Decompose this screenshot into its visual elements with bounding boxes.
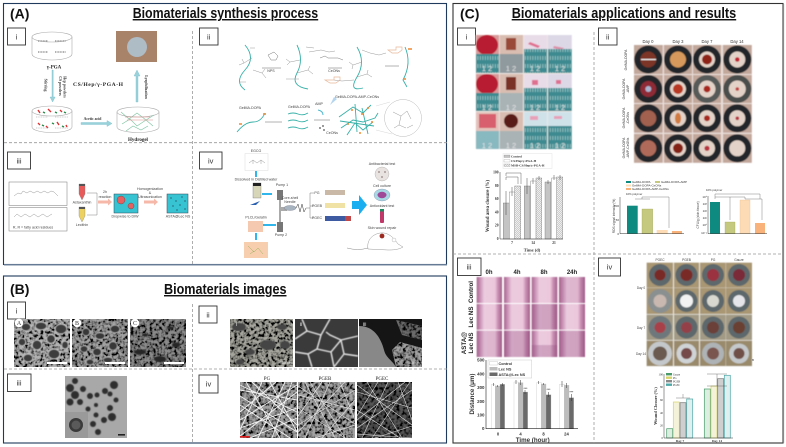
A-i hydrogel synthesis diagram: Hydrogel [128,138,149,143]
polymer strands [239,45,412,90]
C-iii distance bar chart: 8 [542,432,545,436]
A-ii GelMA-DOPA chemistry scheme: CeONs [328,69,340,73]
C-i wound closure photo grid: 1 2 [506,103,516,112]
petri dish [375,167,389,181]
A-iii astaxanthin nanosome preparation: Lecithin [76,223,88,227]
legend [488,360,532,378]
A-i hydrogel synthesis diagram: Hep powders [62,76,66,98]
legend: PG [673,377,677,380]
SEM image ii: dark cells with bright walls [295,319,358,367]
C-ii GelMA hydrogel wound photos: Day 0 [643,39,654,44]
magnified network circle [376,100,422,136]
C-iii distance bar chart: 500 [477,358,485,362]
C-i wound closure photo grid [476,35,572,150]
label B-ii [199,306,217,323]
label A-iv [200,152,222,169]
A-iii astaxanthin nanosome preparation [9,182,191,231]
A-ii GelMA-DOPA chemistry scheme: CeONs [326,131,338,135]
A-iv nanofiber fabrication and testing: PGEB [312,204,323,208]
label B-iii [8,374,31,392]
SEM image iii: surface and particles: 100 nm [408,361,420,365]
SEM image C: dense: C [133,321,137,327]
legend: ASTA@Lec NS [498,373,526,377]
C-i wound closure bar chart: 0 [497,237,499,241]
A-iv nanofiber fabrication and testing: PGEC [312,216,322,220]
A-iii astaxanthin nanosome preparation: Dropwise to DIW [112,214,139,218]
A-iv nanofiber fabrication and testing: Antioxidant test [370,204,394,208]
arrow: blue down fibers [255,233,257,240]
C-i wound closure photo grid: 1 2 [555,141,565,150]
C-iii distance bar chart [469,358,578,444]
C-i wound closure bar chart: 21 [552,241,556,245]
C-ii bar chart: ROS: 0 [617,232,619,236]
A-i hydrogel synthesis diagram: γ-PGA [46,66,62,70]
C-i wound closure photo grid: 1 2 [506,64,516,73]
C-ii GelMA hydrogel wound photos: GelMA-DOPA [624,49,628,70]
C-iv wound closure bar chart: 40 [660,411,664,415]
SEM image ii: dark cells with bright walls: ii [300,322,302,328]
C-ii bar chart: cell viability: 10⁰ [702,223,708,227]
PLCL solution [248,221,263,232]
C-ii bar chart: ROS: 10% polymer [626,192,642,196]
arrow: pink reaction [98,198,112,206]
label B-i: i [16,306,18,316]
C-iii distance bar chart: Distance (μm) [469,374,476,414]
syringe pump solution [250,183,261,205]
legend: Lec NS [498,367,512,371]
legend: GelMA-DOPA [632,180,650,184]
panel B: images: PG [264,377,271,382]
C-i wound closure photo grid: 1 2 [530,103,540,112]
C-i wound closure photo grid: 1 2 [482,103,492,112]
panel B: images: PGEB [319,377,332,382]
C-i wound closure bar chart: 20 [495,224,499,228]
C-iv wound closure bar chart: Day 7 [676,439,684,443]
C-iv wound dressing photo grid [636,258,754,366]
chemical structures [9,182,67,231]
C-iv wound dressing photo grid: Gauze [734,258,744,262]
C-iv wound closure bar chart: 20 [660,424,664,428]
label A-ii: ii [207,32,211,42]
panel A: synthesis process [4,4,447,265]
C-i wound closure photo grid: 1 2 [482,64,492,73]
cell culture oval [374,189,390,201]
label C-iv [598,258,620,276]
A-iv nanofiber fabrication and testing: PG [314,191,320,195]
nanosomes [167,194,188,213]
A-iii astaxanthin nanosome preparation: & [149,191,152,195]
SEM image C: dense [130,319,186,367]
test tube [380,209,384,223]
C-iii cell scratch photos: Lec NS [468,307,475,327]
SEM image B: medium pores [72,319,128,367]
A-ii GelMA-DOPA chemistry scheme: GelMA-DOPA [288,105,311,109]
A-iii astaxanthin nanosome preparation: Ultrasonication [138,195,162,199]
nanofibre image PGEC [357,382,412,438]
C-ii GelMA hydrogel wound photos: GelMA-DOPA [622,137,626,158]
label A-i [8,28,26,45]
fibre patch [244,242,268,258]
A-iii astaxanthin nanosome preparation: reaction [99,195,111,199]
A-iv nanofiber fabrication and testing: Cell culture [373,184,391,188]
C-iii cell scratch photos: Control [468,281,475,303]
legend: GelMA-DOPA-CeONs [632,184,662,188]
TEM image: nanoparticle clusters [65,376,127,438]
C-ii GelMA hydrogel wound photos: -AMP [626,84,630,93]
A-ii GelMA-DOPA chemistry scheme: GelMA-DOPA-AMP-CeONs [335,95,379,99]
label C-i [458,28,476,45]
C-iv wound dressing photo grid: Day 14 [636,352,646,356]
C-i wound closure photo grid: 1 2 [555,64,565,73]
label A-ii [200,28,218,45]
label A-iii: iii [16,156,22,166]
droplets in water [114,194,138,213]
C-ii GelMA hydrogel wound photos: Day 7 [702,39,713,44]
C-i wound closure photo grid: 1 2 [506,141,516,150]
A-i hydrogel synthesis diagram: CS powders [58,76,62,96]
C-ii bar chart: cell viability: 10⁻¹ [701,231,707,235]
A-ii GelMA-DOPA chemistry scheme [237,45,422,136]
A-ii GelMA-DOPA chemistry scheme: AMP [315,102,323,106]
legend: MSB-CS/Hep/γ-PGA-H [511,164,545,168]
label B-ii: ii [206,310,210,320]
C-i wound closure bar chart [486,154,563,252]
C-iv wound closure bar chart: 0 [662,436,664,440]
C-ii bar chart: cell viability [696,188,767,235]
C-i wound closure bar chart: 80 [495,184,499,188]
SEM image A: large pores [14,319,70,367]
label B-iv [199,375,218,393]
heading: synthesis: Biomaterials synthesis process [133,6,318,22]
EGCG structure card [245,154,268,170]
A-iv nanofiber fabrication and testing: PLCL/Gelatin [245,216,267,220]
C-iii cell scratch photos: 4h [513,270,521,276]
label B-iv: iv [206,380,211,388]
C-ii bar chart: ROS [612,180,687,236]
C-iii distance bar chart: 0 [482,426,485,431]
SEM image iii: surface and particles: iii [363,322,366,328]
arrow: blue right pump 2 [263,224,276,226]
label C-iv: iv [607,262,612,272]
C-ii GelMA hydrogel wound photos: Day 3 [673,39,684,44]
legend: Control [511,154,522,158]
C-iii distance bar chart: 0 [497,432,500,436]
label C-ii [598,28,617,45]
A-ii GelMA-DOPA chemistry scheme: GelMA-DOPA [239,106,262,110]
panel letter C: (C) [460,6,479,22]
C-iii distance bar chart: 24 [564,432,569,436]
A-i hydrogel synthesis diagram [32,31,159,143]
A-i hydrogel synthesis diagram: CS/Hep/γ-PGA-H [73,82,124,88]
C-i wound closure bar chart: 100 [493,170,499,174]
C-i wound closure bar chart: Time (d) [524,248,541,252]
A-iii astaxanthin nanosome preparation: Homogenization [137,187,163,191]
C-iv wound closure bar chart: 60 [660,398,664,402]
C-ii bar chart: cell viability: CFU/g (skin tissue) [696,201,700,229]
arrow: pink homogenization [144,198,158,206]
legend: GelMA-DOPA-AMP [661,180,687,184]
A-iv nanofiber fabrication and testing: Pump 2 [275,233,287,237]
A-iv nanofiber fabrication and testing: Antibacterial test [369,162,395,166]
A-iii astaxanthin nanosome preparation: ASTA@Lec NS [166,214,191,218]
panel B: images: PGEC [376,377,389,382]
C-i wound closure bar chart: 60 [495,197,499,201]
C-iii cell scratch photos: 24h [567,270,578,276]
C-ii bar chart: cell viability: 10² [703,209,707,213]
C-iv wound dressing photo grid: PGEB [682,258,691,262]
C-i wound closure bar chart: 40 [495,210,499,214]
label C-iii [458,258,481,276]
panel letter B: (B) [10,281,29,297]
C-iii distance bar chart: 300 [477,385,485,390]
C-iii cell scratch photos: 8h [540,270,548,276]
C-ii bar chart: cell viability: 10³ [703,202,707,206]
C-ii bar chart: ROS: 100 [614,204,619,208]
GelMA-DOPA strands row [237,113,265,132]
panel C: applications and results [453,4,784,444]
C-i wound closure photo grid: 1 2 [530,64,540,73]
C-ii GelMA hydrogel wound photos: GelMA-DOPA [622,78,626,99]
photo matrix [634,45,752,163]
SEM image i: rough aggregates: 100 nm [280,361,292,365]
A-iv nanofiber fabrication and testing: Skin wound repair [368,226,397,230]
A-iv nanofiber fabrication and testing: EGCG [251,149,261,153]
C-i wound closure photo grid: 1 2 [555,103,565,112]
dish: mixed powders [32,106,72,132]
SEM image iii: surface and particles [359,319,422,367]
A-i hydrogel synthesis diagram: Stirring [44,79,48,92]
C-ii bar chart: ROS: ROS signal intensity (%) [612,199,616,233]
label A-i: i [16,32,18,42]
SEM image i: rough aggregates: i [236,322,237,328]
arrow: blue right [262,193,272,195]
C-iv wound dressing photo grid: PG [711,258,716,262]
hydrogel network [339,104,378,135]
arrow: lyophilization [134,70,140,102]
A-i hydrogel synthesis diagram: Lyophilization [144,75,148,100]
C-iii distance bar chart: 100 [477,412,485,418]
C-iii cell scratch photos [461,270,585,357]
panel B: images [4,276,447,443]
A-iii astaxanthin nanosome preparation: Astaxanthin [73,200,91,204]
legend: PGEB [673,380,680,383]
SEM image i: rough aggregates [230,319,293,367]
C-iii distance bar chart: 4 [519,432,522,436]
legend [666,373,681,387]
C-i wound closure bar chart: Wound area closure (%) [486,180,491,232]
C-iv wound closure bar chart: 100 [658,372,664,376]
label B-i [8,302,26,319]
A-iv nanofiber fabrication and testing: Core-shell [282,196,298,200]
C-iii distance bar chart: *** [569,390,574,394]
SEM image B: medium pores: B [75,321,79,327]
C-ii bar chart: cell viability: 10% polymer [706,188,722,192]
arrow: stirring [50,70,55,102]
C-i wound closure photo grid: 1 2 [530,141,540,150]
heading: images: Biomaterials images [164,282,286,298]
tube: astaxanthin [79,184,85,200]
SEM image A: large pores: A [17,321,22,327]
C-ii GelMA hydrogel wound photos: GelMA-DOPA [622,107,626,128]
C-i wound closure bar chart: 14 [531,241,535,245]
legend: CS/Hep/γ-PGA-H [511,159,537,163]
legend: GelMA-DOPA-AMP-CeONs [632,187,669,191]
label C-ii: ii [606,32,610,42]
C-i wound closure photo grid: 1 2 [482,141,492,150]
A-ii GelMA-DOPA chemistry scheme: NPS [267,69,275,73]
C-iii distance bar chart: 400 [477,372,485,376]
heading: applications: Biomaterials applications and results [512,6,736,22]
C-iii distance bar chart: Time (hour) [516,437,550,444]
C-ii bar chart: cell viability: 10¹ [703,216,707,220]
scratch images [477,277,585,357]
A-iv nanofiber fabrication and testing: Pump 1 [276,183,288,187]
nanofibre image PGEB [298,382,355,438]
label A-iii [8,152,30,169]
label B-iii: iii [16,378,22,388]
photo: dried hydrogel disc [116,31,157,62]
label C-iii: iii [466,262,472,272]
reaction arrows [262,66,399,68]
arrow: blue down [255,171,257,177]
legend: Control [498,362,512,366]
legend [503,154,552,168]
C-ii GelMA hydrogel wound photos: -AMP-CeONs [626,137,630,158]
A-iii astaxanthin nanosome preparation: R, R = fatty acid residues [13,226,53,230]
legend [626,180,687,191]
dish: gamma-PGA [32,32,72,60]
A-iv nanofiber fabrication and testing: Dissolved in Distilled water [235,178,278,182]
C-iii cell scratch photos: 0h [485,270,493,276]
C-ii GelMA hydrogel wound photos: Day 14 [730,39,744,44]
pump tubes [277,190,287,232]
arrow: acetic acid [81,120,112,126]
A-i hydrogel synthesis diagram: Acetic acid [84,117,102,121]
C-ii bar chart: cell viability: 10⁴ [702,195,708,199]
C-iv wound dressing photo grid: PGEC [655,258,665,262]
legend: Gauze [673,373,681,376]
C-ii GelMA hydrogel wound photos: -CeONs [626,112,630,124]
C-ii bar chart: ROS: 50 [616,218,619,222]
C-iv wound closure bar chart: 80 [660,385,664,389]
tube: lecithin [79,207,85,222]
C-iii cell scratch photos: ASTA@ [461,332,468,354]
A-iv nanofiber fabrication and testing [235,149,403,258]
C-iv wound closure bar chart: Wound Closure (%) [653,387,658,425]
C-iv wound closure bar chart: Day 14 [712,439,722,443]
arrow: big blue [352,195,367,215]
legend: PGEC [673,384,680,387]
C-ii GelMA hydrogel wound photos [461,39,767,444]
C-iii cell scratch photos: Lec NS [468,333,475,353]
C-iv wound dressing photo grid: Day 0 [637,286,645,290]
C-iv wound dressing photo grid: B [752,358,754,362]
C-iv wound closure bar chart [653,372,733,443]
label A-iv: iv [208,156,214,166]
coaxial needle [284,206,296,210]
A-iii astaxanthin nanosome preparation: 2h [103,190,107,194]
panel letter A: (A) [10,6,29,22]
C-i wound closure bar chart: 7 [511,241,513,245]
C-iii distance bar chart: 200 [477,399,485,404]
label C-i: i [466,32,468,42]
fiber bars [325,190,351,221]
C-iii distance bar chart: *** [547,388,551,392]
mouse [347,233,403,250]
C-iii distance bar chart: *** [524,387,528,391]
A-iv nanofiber fabrication and testing: Needle [284,200,296,204]
dish: hydrogel [117,107,159,132]
nanofibre image PG [240,382,297,438]
C-iv wound dressing photo grid: Day 7 [637,326,645,330]
